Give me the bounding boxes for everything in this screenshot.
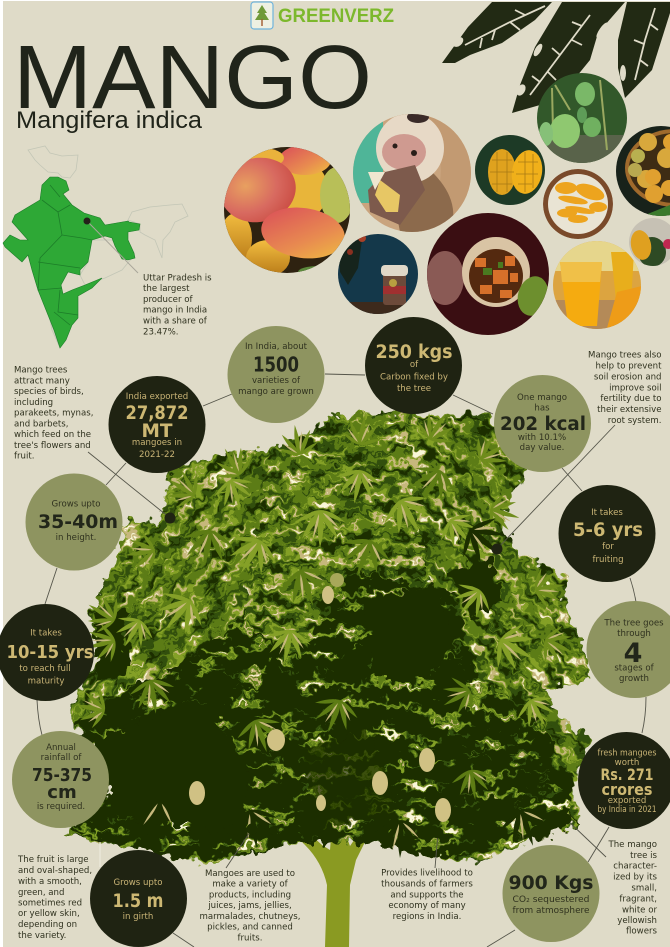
text: flowers: white or bbox=[622, 905, 657, 915]
text: birds: parakeets, mynas, bbox=[14, 409, 93, 419]
photo: mango juice bbox=[553, 241, 643, 330]
text: products: make a variety of bbox=[212, 880, 289, 890]
stat: height: 35-40m bbox=[38, 512, 118, 533]
text: flowers: yellowish bbox=[617, 916, 657, 926]
stat: export value: by India in 2021 bbox=[598, 805, 656, 815]
logo wordmark: GREENVERZ bbox=[278, 6, 394, 27]
text: fruit description: with a smooth, bbox=[18, 877, 82, 887]
stat: carbon fixed: 250 kgs bbox=[376, 342, 452, 363]
text: soil erosion: their extensive bbox=[597, 405, 662, 415]
text: soil erosion: root system. bbox=[608, 416, 662, 426]
leaf sprays: interior mid bbox=[127, 457, 496, 804]
stat: export tonnage: 27,872 bbox=[126, 403, 188, 424]
text: birds: fruit. bbox=[14, 452, 34, 462]
stat: calories: One mango bbox=[517, 393, 567, 403]
text: flowers bbox=[607, 840, 658, 937]
text: Uttar Pradesh: Uttar Pradesh is bbox=[143, 273, 212, 283]
photo: mango slices on plate bbox=[543, 169, 613, 239]
text: soil erosion: help to prevent bbox=[596, 362, 662, 372]
text: flowers: tree is bbox=[630, 851, 658, 861]
photo: mangoes bbox=[224, 147, 350, 273]
stat: stages bbox=[586, 601, 670, 698]
text: fruit description: green, and bbox=[18, 888, 64, 898]
stat: export value: Rs. 271 bbox=[600, 765, 654, 784]
text: flowers: ized by its bbox=[613, 873, 658, 883]
mango fruits bbox=[189, 573, 451, 822]
stat: stages: The tree goes bbox=[603, 619, 664, 629]
text: birds: including bbox=[14, 398, 53, 408]
stat: height: in height. bbox=[56, 533, 96, 543]
map outline of unshaded states bbox=[28, 146, 188, 348]
stat: calories: 202 kcal bbox=[500, 414, 586, 435]
stat: maturity: maturity bbox=[28, 677, 64, 687]
leader: flowers bbox=[560, 814, 606, 857]
stat: rainfall: Annual bbox=[46, 743, 76, 753]
text: soil erosion: fertility due to bbox=[600, 394, 662, 404]
stat: calories: has bbox=[534, 404, 550, 414]
stat: stages: growth bbox=[619, 674, 649, 684]
photo: monkey bbox=[353, 111, 472, 233]
stat: fruiting: 5-6 yrs bbox=[573, 520, 643, 541]
text: livelihood: economy of many bbox=[388, 901, 466, 911]
stat: girth: Grows upto bbox=[113, 878, 163, 888]
stat: carbon fixed bbox=[365, 317, 462, 414]
text: birds: Mango trees bbox=[14, 366, 68, 376]
stat: varieties: In India, about bbox=[245, 342, 308, 352]
text: fruit description: the variety. bbox=[18, 931, 66, 941]
text: soil erosion bbox=[588, 351, 662, 426]
text: flowers: small, bbox=[631, 883, 657, 893]
stat: rainfall bbox=[12, 731, 109, 828]
stat: CO2 sequestered: from atmosphere bbox=[512, 906, 590, 916]
stat: maturity: It takes bbox=[30, 629, 62, 639]
stat: maturity bbox=[0, 604, 94, 701]
text: products: fruits. bbox=[238, 933, 262, 943]
text: livelihood: Provides livelihood to bbox=[381, 869, 473, 879]
text: Uttar Pradesh: mango in India bbox=[143, 306, 207, 316]
text: products: pickles, and canned bbox=[207, 923, 293, 933]
stat: rainfall: is required. bbox=[37, 802, 85, 812]
text: soil erosion: improve soil bbox=[609, 383, 662, 393]
icon: leaves bbox=[442, 2, 670, 113]
stat: carbon fixed: the tree bbox=[397, 384, 431, 394]
stat: export value: worth bbox=[615, 758, 639, 768]
text: Uttar Pradesh bbox=[143, 273, 212, 337]
text: Uttar Pradesh: with a share of bbox=[143, 316, 208, 326]
text: soil erosion: soil erosion and bbox=[594, 372, 662, 382]
text: soil erosion: Mango trees also bbox=[588, 351, 662, 361]
text: birds: species of birds, bbox=[14, 387, 84, 397]
state borders bbox=[38, 185, 92, 325]
stat: varieties: varieties of bbox=[252, 376, 301, 386]
text: Uttar Pradesh: producer of bbox=[143, 295, 193, 305]
stat: rainfall: 75-375 bbox=[32, 765, 92, 786]
stat: girth: in girth bbox=[123, 912, 153, 922]
leader: livelihood bbox=[432, 828, 444, 868]
stat: export tonnage: MT bbox=[141, 421, 173, 442]
text: fruit description: sometimes red bbox=[18, 898, 82, 908]
photo: pickle jar bbox=[338, 234, 418, 314]
logo icon bbox=[251, 2, 273, 29]
stat: export tonnage bbox=[108, 376, 206, 473]
text: birds: and barbets, bbox=[14, 419, 68, 429]
leaf sprays: edge bbox=[71, 403, 581, 731]
leaf sprays: dark bbox=[123, 508, 558, 858]
text: fruit description: The fruit is large bbox=[17, 855, 89, 865]
stat: export value: fresh mangoes bbox=[598, 749, 657, 759]
text: birds: which feed on the bbox=[14, 430, 91, 440]
text: livelihood bbox=[381, 869, 473, 922]
stat: CO2 sequestered bbox=[502, 845, 600, 942]
leader: products bbox=[226, 824, 258, 868]
stat: fruiting: fruiting bbox=[592, 555, 624, 565]
stat: export value: exported bbox=[608, 796, 646, 806]
text: birds: attract many bbox=[14, 376, 70, 386]
stat: carbon fixed: Carbon fixed by bbox=[380, 373, 448, 383]
text: birds bbox=[14, 366, 93, 462]
canopy bbox=[64, 410, 592, 866]
text: fruit description bbox=[17, 855, 92, 941]
logo bbox=[251, 2, 394, 29]
text: livelihood: regions in India. bbox=[393, 912, 461, 922]
text: flowers: flowers bbox=[626, 927, 658, 937]
title: MANGO bbox=[13, 28, 372, 128]
photo: cut mango bbox=[475, 135, 546, 205]
stat: export tonnage: mangoes in bbox=[132, 438, 182, 448]
leader: root system bbox=[492, 425, 615, 554]
stat: calories bbox=[494, 375, 591, 472]
text: livelihood: thousands of farmers bbox=[381, 880, 473, 890]
connector lines bbox=[37, 374, 646, 947]
text: flowers: The mango bbox=[607, 840, 657, 850]
stat: height: Grows upto bbox=[51, 500, 101, 510]
photo: green mangoes on tree bbox=[537, 73, 627, 163]
text: fruit description: and oval-shaped, bbox=[18, 866, 92, 876]
stat: fruiting: for bbox=[602, 542, 614, 552]
stat: fruiting bbox=[558, 485, 656, 582]
photo: basket of mangoes bbox=[616, 126, 670, 217]
stat: girth: 1.5 m bbox=[112, 891, 164, 912]
stat: stages: through bbox=[617, 629, 651, 639]
text: products: marmalades, chutneys, bbox=[199, 912, 301, 922]
text: flowers: character- bbox=[613, 862, 657, 872]
stat: maturity: 10-15 yrs bbox=[6, 642, 94, 663]
subtitle: Mangifera indica bbox=[16, 107, 203, 134]
text: livelihood: and supports the bbox=[390, 890, 464, 900]
leaf sprays: interior bright bbox=[107, 464, 563, 737]
trunk bbox=[272, 790, 374, 947]
leader: birds bbox=[88, 452, 176, 524]
stat: export value: crores bbox=[602, 780, 652, 799]
stat: export tonnage: India exported bbox=[126, 392, 188, 402]
location marker bbox=[84, 218, 90, 224]
stat: fruiting: It takes bbox=[591, 508, 623, 518]
stat: stages: 4 bbox=[624, 638, 642, 669]
stat: export tonnage: 2021-22 bbox=[139, 450, 175, 460]
text: flowers: fragrant, bbox=[619, 894, 657, 904]
stat: varieties: mango are grown bbox=[238, 387, 314, 397]
highlighted states bbox=[3, 177, 140, 348]
stat: height bbox=[26, 474, 122, 570]
stat: export value bbox=[578, 732, 670, 829]
stat: maturity: to reach full bbox=[19, 664, 71, 674]
stat: calories: day value. bbox=[520, 443, 564, 453]
map of India bbox=[3, 146, 188, 348]
text: fruit description: or yellow skin, bbox=[18, 909, 80, 919]
stat: CO2 sequestered: 900 Kgs bbox=[508, 873, 594, 894]
text: Uttar Pradesh: 23.47%. bbox=[143, 327, 178, 337]
text: products: juices, jams, jellies, bbox=[207, 901, 292, 911]
stat: varieties bbox=[228, 326, 324, 423]
photo: mango and flower bbox=[628, 218, 670, 267]
stat: carbon fixed: of bbox=[410, 360, 419, 370]
text: Uttar Pradesh: the largest bbox=[143, 284, 190, 294]
stat: calories: with 10.1% bbox=[518, 433, 566, 443]
location marker line bbox=[87, 221, 138, 273]
text: fruit description: depending on bbox=[18, 920, 77, 930]
photo: curry bowl bbox=[426, 213, 553, 335]
text: products bbox=[199, 869, 301, 943]
text: products: products, including bbox=[209, 890, 291, 900]
stat: rainfall: rainfall of bbox=[41, 753, 82, 763]
tree bbox=[64, 410, 592, 947]
stat: varieties: 1500 bbox=[253, 352, 299, 376]
stat: girth bbox=[90, 850, 187, 947]
stat: stages: stages of bbox=[614, 664, 655, 674]
stat: rainfall: cm bbox=[47, 782, 77, 803]
stat: CO2 sequestered: CO₂ sequestered bbox=[512, 895, 590, 905]
text: birds: tree's flowers and bbox=[14, 441, 91, 451]
text: products: Mangoes are used to bbox=[205, 869, 295, 879]
